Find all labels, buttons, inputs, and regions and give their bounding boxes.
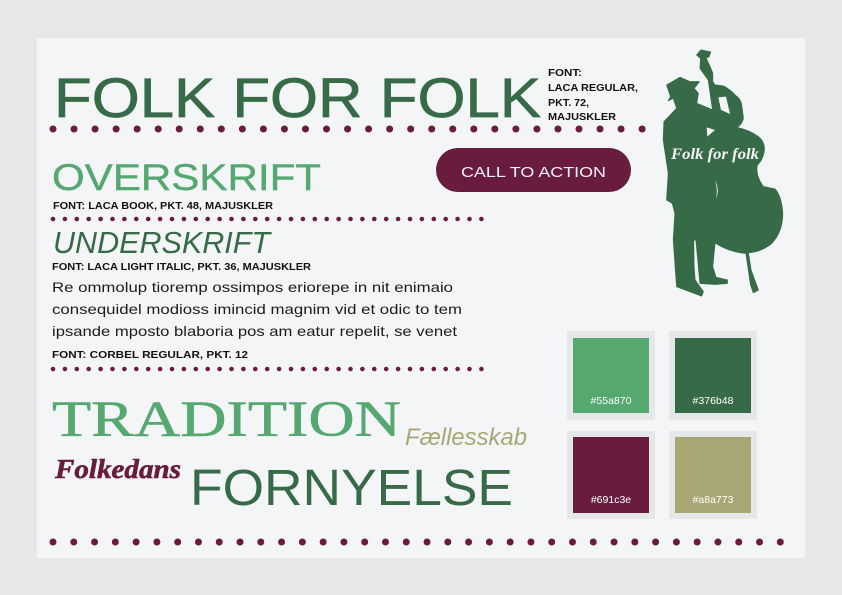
swatch: green 55a870 xyxy=(567,331,655,420)
word: folkedans: Folkedans xyxy=(54,454,181,484)
logo text: folk for folk: Folk for folk xyxy=(670,146,759,163)
text block: body copy: ipsande mposto blaboria pos am eatur repelit, se venet xyxy=(52,323,457,339)
word: faellesskab: Fællesskab xyxy=(405,424,527,451)
title: FOLK FOR FOLK xyxy=(54,66,541,129)
panel: style guide sheet xyxy=(37,38,805,558)
caption: overskrift font: FONT: LACA BOOK, PKT. 48, MAJUSKLER xyxy=(53,201,274,212)
swatch: dark green 376b48 xyxy=(669,331,757,420)
swatch: burgundy 691c3e xyxy=(567,431,655,519)
swatch: dark green 376b48: #376b48 xyxy=(693,395,734,407)
swatch: burgundy 691c3e: #691c3e xyxy=(591,494,631,506)
text block: title font note xyxy=(548,68,638,123)
text block: body copy: consequidel modioss imincid magnim vid et odic to tem xyxy=(52,301,462,317)
word: tradition: TRADITION xyxy=(52,392,401,448)
text block: title font note: FONT: xyxy=(548,68,582,79)
swatch: green 55a870: #55a870 xyxy=(591,395,632,407)
button: call to action xyxy=(436,148,631,192)
button: call to action: CALL TO ACTION xyxy=(461,164,606,181)
word: fornyelse: FORNYELSE xyxy=(190,459,513,516)
swatch: olive a8a773 xyxy=(669,431,757,519)
heading: overskrift: OVERSKRIFT xyxy=(52,157,321,198)
caption: body font: FONT: CORBEL REGULAR, PKT. 12 xyxy=(52,350,249,361)
heading: underskrift: UNDERSKRIFT xyxy=(53,225,272,260)
text block: body copy: Re ommolup tioremp ossimpos eriorepe in nit enimaio xyxy=(52,279,453,295)
swatch: olive a8a773: #a8a773 xyxy=(693,494,734,506)
icon: double bass player silhouette xyxy=(663,50,783,296)
caption: underskrift font: FONT: LACA LIGHT ITALIC, PKT. 36, MAJUSKLER xyxy=(52,262,312,273)
text block: title font note: LACA REGULAR, xyxy=(548,83,638,94)
text block: body copy xyxy=(52,279,462,339)
text block: title font note: MAJUSKLER xyxy=(548,112,617,123)
text block: title font note: PKT. 72, xyxy=(548,98,589,109)
